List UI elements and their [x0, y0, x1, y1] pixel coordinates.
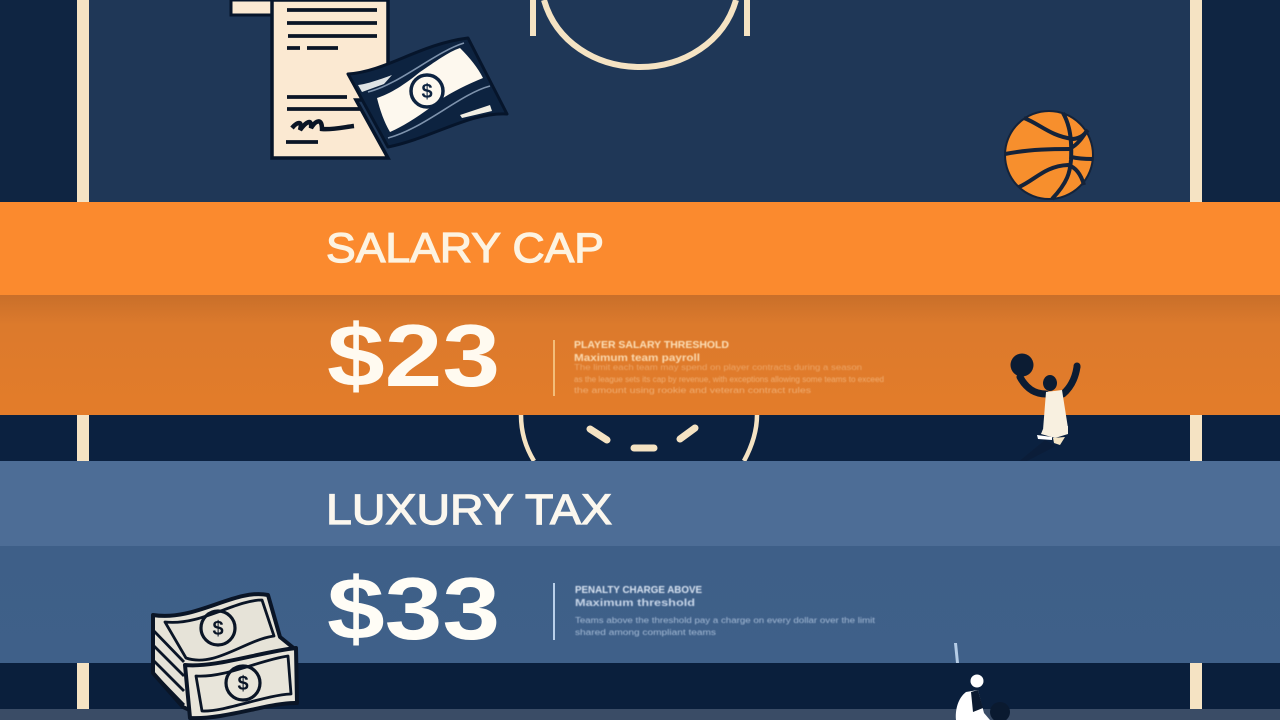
icon: dollar bill: $: [421, 81, 433, 103]
luxury tax description: Maximum threshold: [575, 597, 695, 609]
icon: player dunking silhouette: [1010, 354, 1080, 465]
icon: dollar bill: [348, 38, 507, 147]
icon: seated player silhouette: [954, 643, 1010, 720]
salary cap divider: [553, 340, 555, 396]
icon: contract document: [231, 0, 388, 158]
luxury tax description: PENALTY CHARGE ABOVE: [575, 584, 702, 596]
luxury tax heading: LUXURY TAX: [326, 486, 612, 534]
salary cap heading: SALARY CAP: [326, 224, 604, 271]
luxury tax header band: [0, 461, 1280, 546]
luxury tax description: [575, 584, 876, 637]
salary cap figure: $23: [327, 306, 500, 405]
court key arc, top: [533, 0, 747, 67]
salary cap description: [574, 339, 884, 395]
salary cap description: as the league sets its cap by revenue, with exceptions allowing some teams to exceed: [574, 375, 884, 384]
court free-throw arc, middle: [521, 415, 757, 461]
salary cap description: Maximum team payroll: [574, 352, 700, 364]
icon: stack of cash: $: [212, 618, 224, 640]
luxury tax body band: [0, 546, 1280, 663]
icon: basketball: [1005, 111, 1093, 199]
icon: stack of cash: [153, 594, 297, 718]
salary cap description: PLAYER SALARY THRESHOLD: [574, 339, 729, 351]
salary cap description: The limit each team may spend on player contracts during a season: [574, 363, 862, 372]
salary cap header band: [0, 202, 1280, 295]
panel: luxury tax: [0, 461, 1280, 663]
panel: salary cap: [0, 202, 1280, 415]
salary cap description: the amount using rookie and veteran contract rules: [574, 386, 811, 395]
luxury tax divider: [553, 583, 555, 640]
luxury tax figure: $33: [327, 559, 500, 658]
luxury tax description: shared among compliant teams: [575, 628, 716, 637]
salary cap body band: [0, 295, 1280, 415]
luxury tax description: Teams above the threshold pay a charge on every dollar over the limit: [575, 616, 876, 625]
icon: stack of cash: $: [237, 673, 249, 695]
